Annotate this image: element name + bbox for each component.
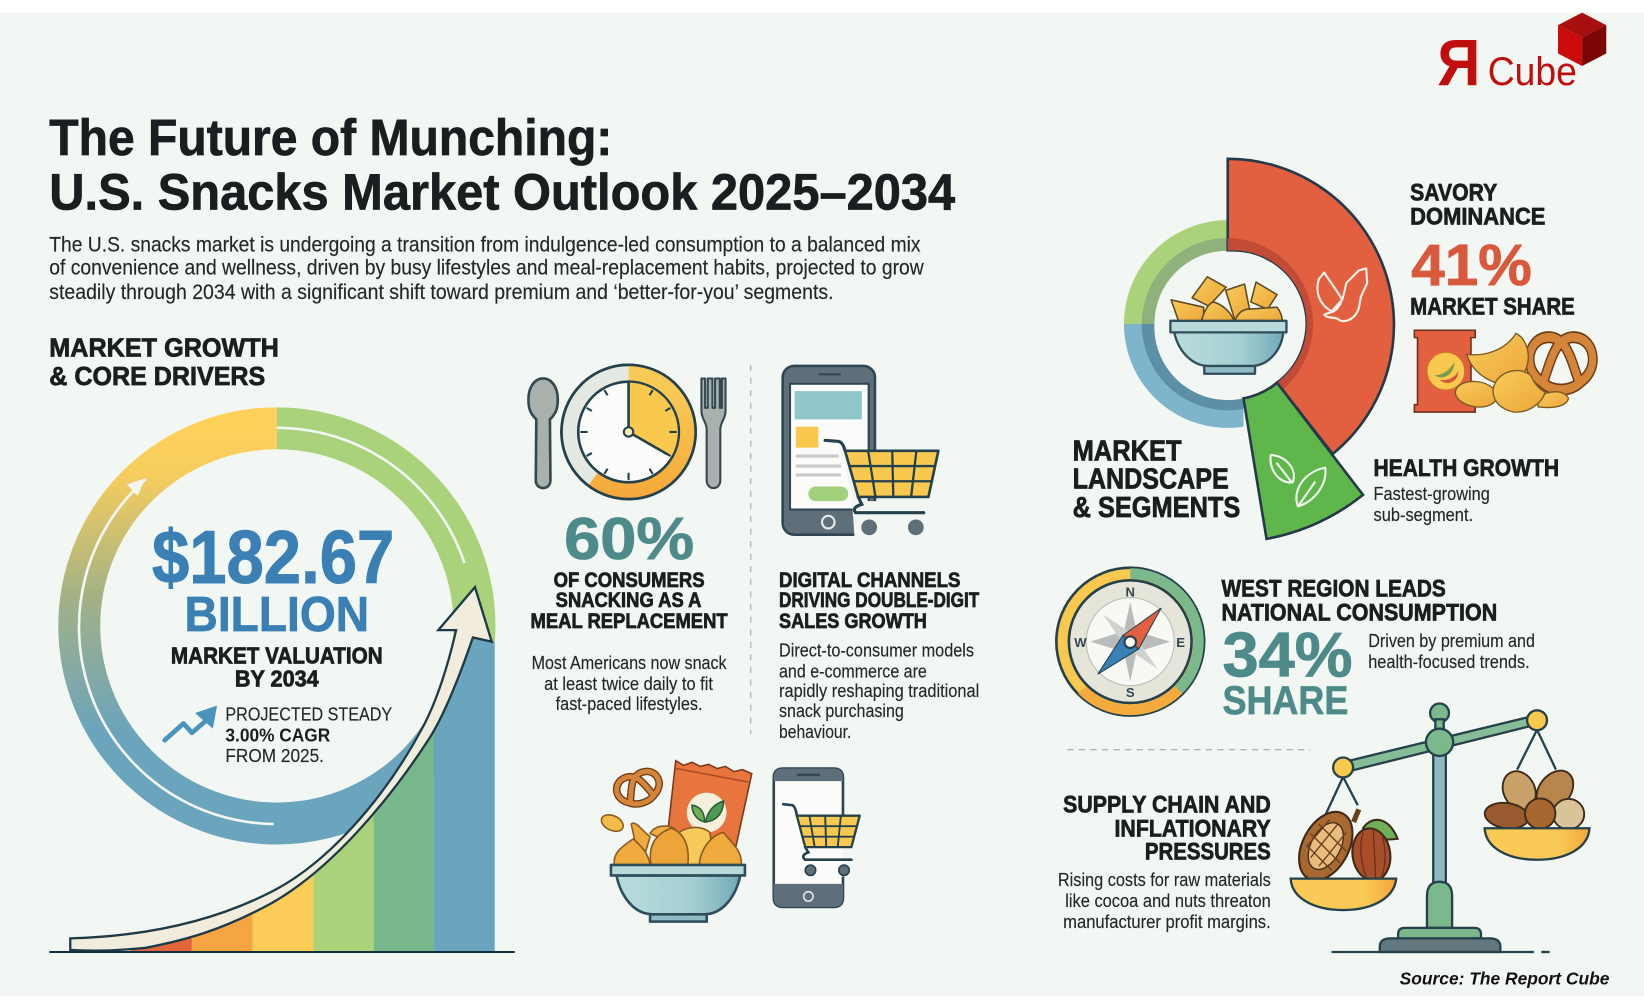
text: supply description: like cocoa and nuts threaton <box>1065 890 1271 911</box>
heading: market growth <box>49 332 279 391</box>
text: digital description: snack purchasing <box>779 700 904 721</box>
callout: health growth: Fastest-growing <box>1373 483 1490 504</box>
panel: supply chain <box>1058 704 1589 952</box>
heading: consumers snacking: SNACKING AS A <box>556 589 701 612</box>
icon: pretzel <box>613 768 664 809</box>
sector: savory red <box>1228 159 1394 454</box>
stat: market valuation: MARKET VALUATION <box>171 643 383 669</box>
callout: health growth: sub-segment. <box>1373 504 1473 525</box>
intro paragraph: of convenience and wellness, driven by busy lifestyles and meal-replacement habits, projected to grow <box>49 257 924 280</box>
icon: compass: S <box>1126 685 1135 700</box>
icon: trend arrow <box>165 706 217 740</box>
text: snacking description: Most Americans now snack <box>532 652 727 673</box>
logo wordmark: Cube <box>1488 50 1577 94</box>
heading: market growth: MARKET GROWTH <box>49 332 279 362</box>
text: snacking description <box>532 652 727 714</box>
callout: savory dominance <box>1410 179 1575 321</box>
callout: savory dominance: SAVORY <box>1410 179 1497 206</box>
nuts <box>1483 764 1584 831</box>
icon: compass: N <box>1126 585 1135 600</box>
heading: west region <box>1221 576 1497 627</box>
icon: phone with shopping cart <box>783 366 938 537</box>
heading: consumers snacking: OF CONSUMERS <box>554 569 705 592</box>
icon: savory snacks <box>1414 330 1593 412</box>
illustration: snack bowl <box>599 761 752 922</box>
icon: chili outline <box>1317 268 1367 321</box>
callout: savory dominance: 41% <box>1411 233 1532 298</box>
heading: supply chain <box>1063 792 1271 866</box>
heading: market landscape: LANDSCAPE <box>1073 463 1229 495</box>
plate and clock face <box>561 365 696 499</box>
logo wordmark <box>1437 25 1577 99</box>
icon: compass <box>1056 568 1204 716</box>
right pan <box>1485 828 1589 860</box>
heading: supply chain: SUPPLY CHAIN AND <box>1063 792 1271 819</box>
heading: digital channels: DRIVING DOUBLE-DIGIT <box>779 589 979 612</box>
axis baseline <box>49 951 515 953</box>
heading: market landscape: & SEGMENTS <box>1073 491 1240 523</box>
scale stand <box>1332 734 1550 952</box>
heading: market growth: & CORE DRIVERS <box>49 361 265 391</box>
ring: blue segment <box>1124 324 1243 428</box>
icon: fork <box>701 378 726 488</box>
text: digital description <box>779 639 979 742</box>
text: west description: health-focused trends. <box>1368 651 1530 672</box>
cart <box>783 804 860 875</box>
icon: red cube <box>1558 13 1606 66</box>
text: supply description <box>1058 869 1271 932</box>
icon: bowl <box>611 865 745 922</box>
panel: digital channels <box>779 366 979 742</box>
callout: health growth: HEALTH GROWTH <box>1373 455 1559 482</box>
heading: west region: WEST REGION LEADS <box>1221 576 1446 603</box>
heading: digital channels <box>779 569 979 633</box>
chips <box>1454 333 1568 412</box>
stat: market valuation: BY 2034 <box>235 666 319 692</box>
pretzel <box>1530 337 1593 390</box>
logo: RCube <box>1437 13 1606 99</box>
source note: Source: The Report Cube <box>1400 968 1609 988</box>
text: west description: Driven by premium and <box>1368 630 1535 651</box>
heading: digital channels: SALES GROWTH <box>779 610 927 633</box>
text: projected CAGR: 3.00% CAGR <box>225 724 331 745</box>
phone body <box>783 366 875 535</box>
stat: 60 percent: 60% <box>564 505 694 572</box>
heading: west region: NATIONAL CONSUMPTION <box>1221 600 1497 627</box>
icon: leaves <box>1271 455 1325 506</box>
callout: health growth <box>1373 455 1559 525</box>
left pan <box>1291 879 1396 910</box>
panel: market landscape <box>1073 159 1593 539</box>
ring: valuation circle <box>79 428 474 824</box>
heading: supply chain: PRESSURES <box>1145 839 1271 866</box>
arrow: growth curve <box>70 587 492 951</box>
icon: compass: E <box>1176 635 1185 650</box>
cart <box>825 440 938 537</box>
icon: snack bag <box>668 761 752 846</box>
heading: consumers snacking <box>531 569 728 633</box>
bar chart: rising bars <box>131 629 495 952</box>
text: snacking description: at least twice daily to fit <box>544 673 713 694</box>
text: supply description: manufacturer profit margins. <box>1063 911 1271 932</box>
snack bag <box>1414 330 1475 412</box>
intro paragraph <box>49 234 924 304</box>
stat: 34 percent share: SHARE <box>1223 679 1348 723</box>
heading: consumers snacking: MEAL REPLACEMENT <box>531 610 728 633</box>
scale beam <box>1323 704 1556 820</box>
phone outline <box>774 769 843 907</box>
text: projected CAGR: PROJECTED STEADY <box>225 703 392 724</box>
text: projected CAGR: FROM 2025. <box>225 745 324 766</box>
icon: clock plate with spoon and fork <box>528 365 726 499</box>
title: U.S. Snacks Market Outlook 2025–2034 <box>49 163 956 221</box>
icon: chips <box>1171 277 1282 321</box>
panel: west region <box>1056 568 1535 723</box>
text: snacking description: fast-paced lifestyles. <box>556 693 702 714</box>
text: digital description: Direct-to-consumer models <box>779 639 974 660</box>
panel: market growth chart <box>49 428 515 952</box>
stat: 34 percent share: 34% <box>1223 620 1353 690</box>
stat: market valuation <box>152 515 394 692</box>
panel: meal replacement <box>528 365 728 714</box>
stat: 34 percent share <box>1223 620 1353 723</box>
icon: compass: W <box>1074 635 1087 650</box>
sector: health green <box>1243 383 1363 539</box>
title <box>49 108 956 221</box>
ring: green segment <box>1124 220 1228 324</box>
text: digital description: rapidly reshaping traditional <box>779 680 979 701</box>
heading: market landscape: MARKET <box>1073 434 1182 466</box>
callout: savory dominance: DOMINANCE <box>1410 203 1545 230</box>
text: west description <box>1368 630 1535 672</box>
stat: market valuation: $182.67 <box>152 515 394 599</box>
text: supply description: Rising costs for raw materials <box>1058 869 1271 890</box>
title: The Future of Munching: <box>49 108 612 166</box>
intro paragraph: steadily through 2034 with a significant shift toward premium and ‘better-for-you’ segments. <box>49 281 834 304</box>
icon: balance scale <box>1288 704 1589 952</box>
text: projected CAGR <box>225 703 392 766</box>
callout: savory dominance: MARKET SHARE <box>1410 294 1575 321</box>
text: digital description: and e-commerce are <box>779 660 927 681</box>
heading: supply chain: INFLATIONARY <box>1115 816 1271 843</box>
intro paragraph: The U.S. snacks market is undergoing a transition from indulgence-led consumption to a balanced mix <box>49 234 921 257</box>
logo wordmark: Я <box>1437 25 1480 99</box>
snack pieces <box>599 812 741 865</box>
stat: market valuation: BILLION <box>185 587 369 642</box>
centre circle <box>1155 252 1300 396</box>
icon: spoon <box>528 378 558 488</box>
illustration: phone cart <box>774 769 860 907</box>
heading: market landscape <box>1073 434 1240 523</box>
cocoa pods <box>1288 803 1398 889</box>
icon: bowl <box>1170 321 1286 374</box>
text: digital description: behaviour. <box>779 721 851 742</box>
donut chart: market segments <box>1124 159 1394 539</box>
heading: digital channels: DIGITAL CHANNELS <box>779 569 960 592</box>
